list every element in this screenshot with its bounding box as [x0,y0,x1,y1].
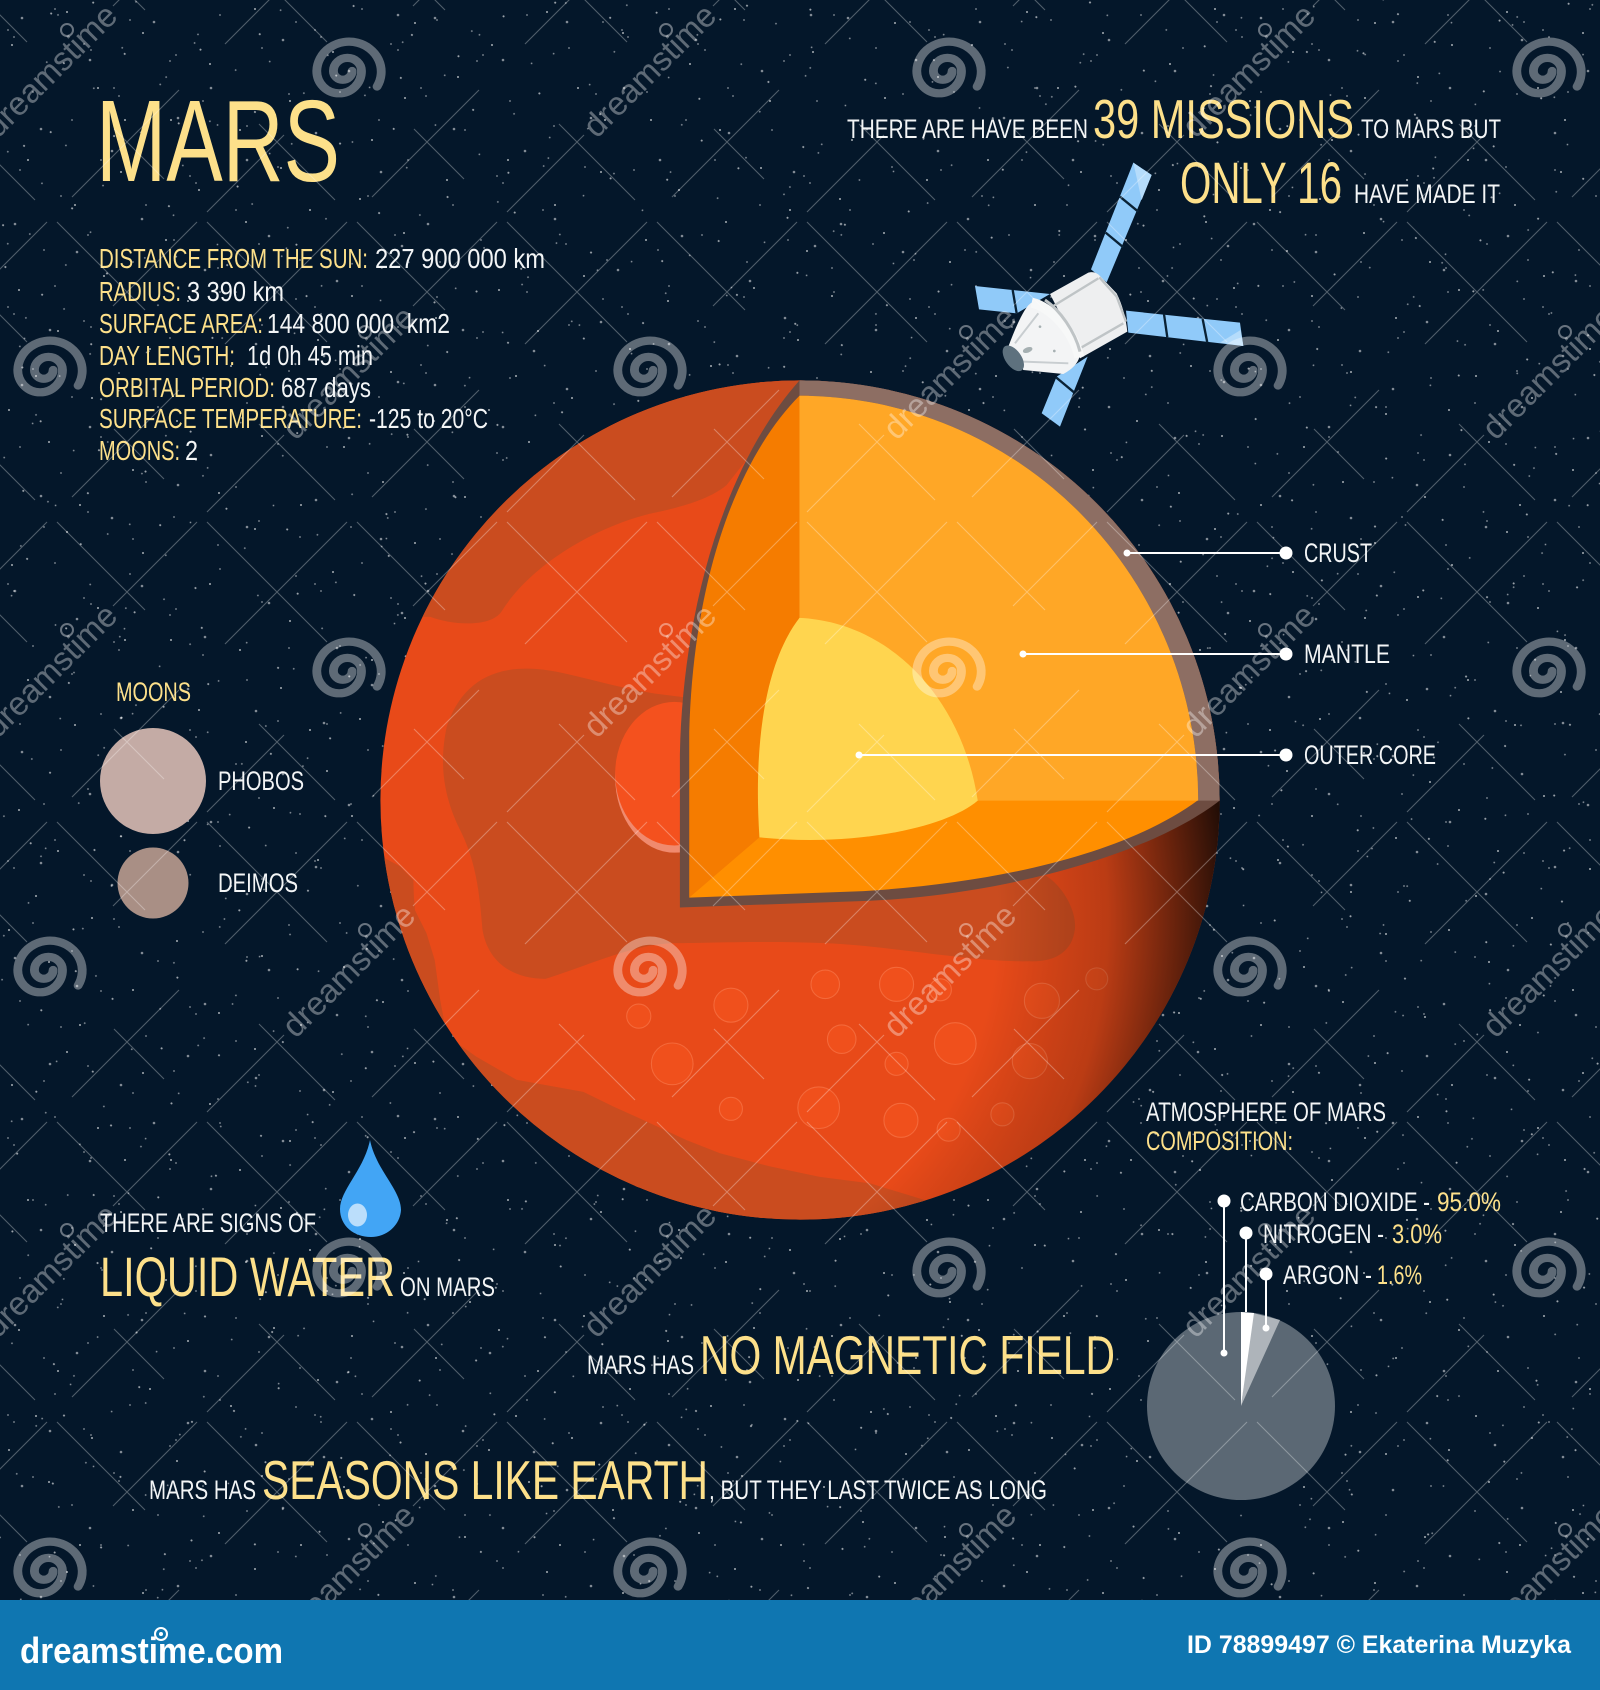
mantle layer [689,396,1198,898]
watermark text: dreamstime [575,0,723,144]
pie chart [1147,1312,1335,1500]
icon: satellite [975,163,1243,427]
panel: atmosphere composition: COMPOSITION: [1146,1126,1293,1156]
text block: magnetic field [587,1324,1115,1386]
text block: missions: THERE ARE HAVE BEEN [847,114,1088,144]
legend: nitrogen [1240,1219,1442,1312]
watermark text: dreamstime [274,896,422,1044]
text block: planet facts: ORBITAL PERIOD: [99,372,275,403]
watermark text: dreamstime [875,298,1023,446]
callout: crust: CRUST [1304,538,1372,568]
text block: planet facts: SURFACE AREA: [99,308,263,339]
text block: planet facts: DAY LENGTH: [99,340,235,371]
text block: planet facts: SURFACE TEMPERATURE: [99,403,362,434]
panel: moons [100,677,304,918]
legend: carbon dioxide: CARBON DIOXIDE - [1240,1187,1430,1217]
text block: planet facts: RADIUS: [99,276,181,307]
panel: moons: DEIMOS [218,868,298,898]
planet: Mars cross-section [370,370,1230,1248]
text block: seasons: , BUT THEY LAST TWICE AS LONG [709,1475,1047,1505]
legend: nitrogen: NITROGEN - [1263,1219,1384,1249]
text block: missions: 39 MISSIONS [1093,88,1354,150]
watermark text: dreamstime [274,298,422,446]
crust layer [680,380,1220,908]
text block: planet facts: 144 800 000 km2 [267,308,450,339]
watermark text: dreamstime [1174,0,1322,144]
text block: magnetic field: NO MAGNETIC FIELD [700,1324,1115,1386]
watermark text: dreamstime [1174,596,1322,744]
callout: outer core: OUTER CORE [1304,740,1436,770]
panel: liquid water: THERE ARE SIGNS OF [100,1208,316,1238]
watermark text: dreamstime [875,896,1023,1044]
panel: liquid water: ON MARS [400,1272,495,1302]
legend: argon: 1.6% [1377,1260,1422,1290]
panel: atmosphere composition: ATMOSPHERE OF MARS [1146,1097,1386,1127]
watermark text: dreamstime [575,596,723,744]
callout: crust [1124,538,1372,568]
legend: carbon dioxide: 95.0% [1437,1187,1501,1217]
text block: planet facts: 1d 0h 45 min [247,340,373,371]
legend: argon [1260,1260,1422,1332]
watermark text: dreamstime [575,1196,723,1344]
text block: planet facts: 687 days [281,372,371,403]
text block: missions: ONLY 16 [1180,151,1342,216]
callout: mantle [1020,639,1390,669]
panel: liquid water: LIQUID WATER [100,1245,395,1308]
text block: planet facts: 2 [185,435,198,466]
callout: mantle: MANTLE [1304,639,1390,669]
text block: magnetic field: MARS HAS [587,1350,694,1380]
icon: water drop [340,1140,401,1237]
watermark text: dreamstime [274,1496,422,1644]
text block: missions [847,88,1501,216]
text block: seasons: MARS HAS [149,1475,256,1505]
text block: planet facts: MOONS: [99,435,180,466]
watermark text: dreamstime [1174,1196,1322,1344]
text block: planet facts: 227 900 000 km [375,243,545,274]
callout: outer core [856,740,1436,770]
text block: seasons [149,1449,1047,1511]
text block: planet facts: DISTANCE FROM THE SUN: [99,243,368,274]
legend: carbon dioxide [1218,1187,1501,1356]
panel: moons: PHOBOS [218,766,304,796]
text block: planet facts: -125 to 20°C [369,403,488,434]
text block: missions: HAVE MADE IT [1354,179,1500,209]
planet surface [370,370,1230,1248]
panel: liquid water [100,1140,495,1308]
watermark text: dreamstime [875,1496,1023,1644]
footer bar: ID 78899497 © Ekaterina Muzyka [1187,1631,1572,1659]
text block: seasons: SEASONS LIKE EARTH [262,1449,708,1511]
panel: moons: MOONS [116,677,191,707]
text block: planet facts: 3 390 km [187,276,284,307]
legend: argon: ARGON - [1283,1260,1372,1290]
footer bar [0,1600,1600,1690]
text block: missions: TO MARS BUT [1361,114,1501,144]
footer bar: dreamstime.com [20,1630,283,1671]
text block: planet facts [99,243,545,466]
panel: atmosphere composition [1146,1097,1501,1500]
legend: nitrogen: 3.0% [1392,1219,1442,1249]
outer core [758,618,978,840]
title: MARS [96,76,340,206]
